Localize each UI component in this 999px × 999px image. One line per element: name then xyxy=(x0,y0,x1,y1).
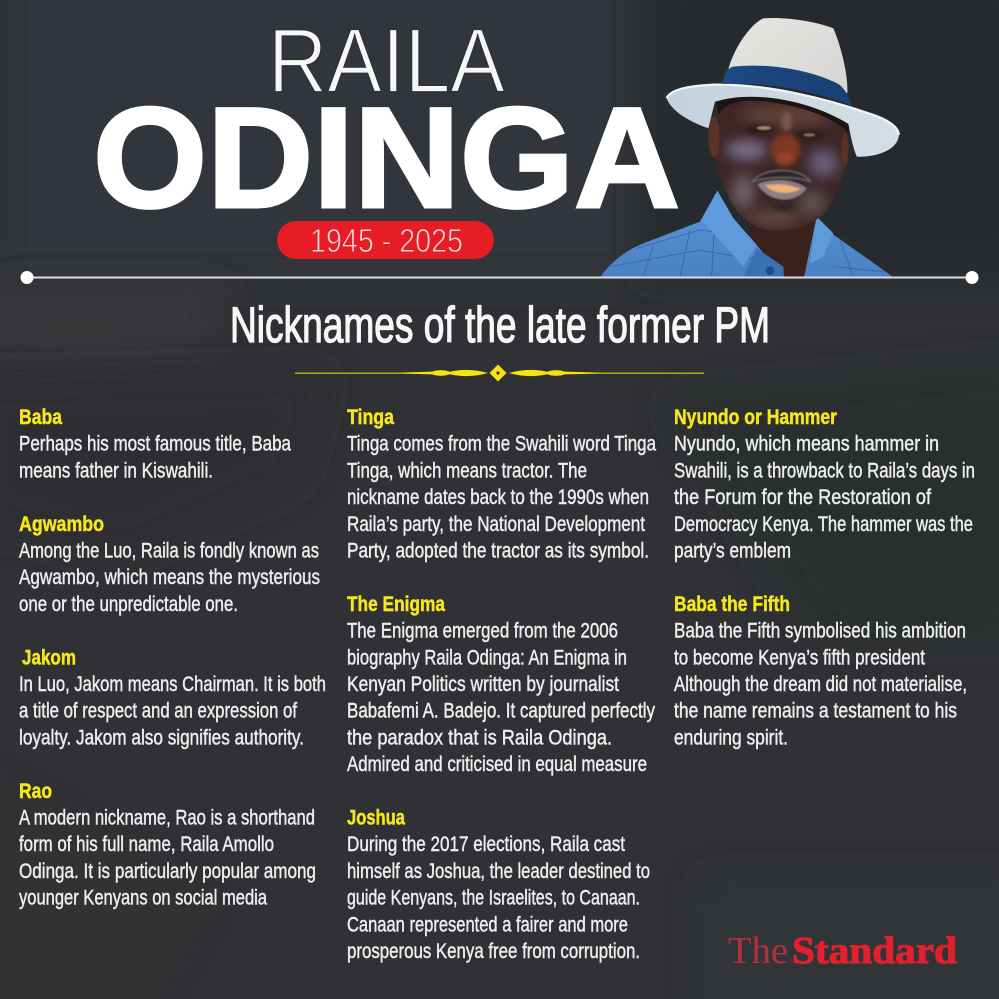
The Enigma: the paradox that is Raila Odinga. xyxy=(347,725,612,749)
logo: The Standard xyxy=(728,930,957,972)
Nyundo or Hammer: party’s emblem xyxy=(674,538,791,562)
Tinga: Tinga xyxy=(347,406,394,429)
Jakom xyxy=(19,646,326,749)
portrait hat xyxy=(667,18,899,157)
Joshua: During the 2017 elections, Raila cast xyxy=(347,832,625,856)
yellow ornament xyxy=(295,364,704,382)
Jakom: Jakom xyxy=(22,646,76,669)
Rao: Odinga. It is particularly popular among xyxy=(19,859,316,883)
Joshua: himself as Joshua, the leader destined to xyxy=(347,859,650,883)
Baba: Perhaps his most famous title, Baba xyxy=(19,432,291,456)
The Enigma: biography Raila Odinga: An Enigma in xyxy=(347,645,627,669)
Baba: Baba xyxy=(19,406,62,429)
Baba the Fifth xyxy=(674,593,967,749)
Baba: means father in Kiswahili. xyxy=(19,458,213,482)
Tinga: Party, adopted the tractor as its symbol. xyxy=(347,538,649,562)
Rao: form of his full name, Raila Amollo xyxy=(19,832,274,856)
Nyundo or Hammer: the Forum for the Restoration of xyxy=(674,485,931,509)
Nyundo or Hammer: Nyundo, which means hammer in xyxy=(674,432,939,456)
Agwambo: Agwambo xyxy=(19,513,104,536)
Jakom: a title of respect and an expression of xyxy=(19,699,297,723)
Tinga: Tinga comes from the Swahili word Tinga xyxy=(347,432,656,456)
Rao xyxy=(19,780,316,910)
Baba xyxy=(19,406,291,482)
logo: The Standard: The xyxy=(728,930,788,972)
The Enigma: The Enigma xyxy=(347,593,445,616)
Tinga xyxy=(347,406,656,562)
Rao: A modern nickname, Rao is a shorthand xyxy=(19,806,315,830)
Agwambo: Agwambo, which means the mysterious xyxy=(19,565,320,589)
logo: The Standard: Standard xyxy=(792,930,957,972)
The Enigma xyxy=(347,593,655,776)
Tinga: Raila’s party, the National Development xyxy=(347,512,645,536)
portrait face xyxy=(708,96,849,231)
column 2 xyxy=(347,406,656,963)
Tinga: Tinga, which means tractor. The xyxy=(347,458,587,482)
Rao: younger Kenyans on social media xyxy=(19,886,267,910)
portrait shirt xyxy=(600,191,893,277)
portrait neck xyxy=(743,213,820,277)
Jakom: loyalty. Jakom also signifies authority. xyxy=(19,725,304,749)
Agwambo: one or the unpredictable one. xyxy=(19,592,238,616)
Baba the Fifth: to become Kenya’s fifth president xyxy=(674,645,925,669)
Jakom: In Luo, Jakom means Chairman. It is both xyxy=(19,672,326,696)
portrait: man in white hat and blue shirt xyxy=(600,18,899,277)
Nyundo or Hammer xyxy=(674,406,975,562)
Tinga: nickname dates back to the 1990s when xyxy=(347,485,649,509)
title: ODINGA: ODINGA xyxy=(93,79,680,238)
date pill: 1945 - 2025 xyxy=(310,222,463,259)
Joshua xyxy=(347,806,650,963)
Baba the Fifth: enduring spirit. xyxy=(674,725,788,749)
Joshua: prosperous Kenya free from corruption. xyxy=(347,939,640,963)
title: RAILA: RAILA xyxy=(268,11,505,112)
Joshua: Canaan represented a fairer and more xyxy=(347,912,628,936)
divider line with end dots xyxy=(20,271,978,284)
Joshua: Joshua xyxy=(347,806,405,830)
column 1 xyxy=(19,406,326,910)
Nyundo or Hammer: Nyundo or Hammer xyxy=(674,406,837,429)
Agwambo xyxy=(19,513,320,616)
The Enigma: The Enigma emerged from the 2006 xyxy=(347,619,618,643)
Agwambo: Among the Luo, Raila is fondly known as xyxy=(19,538,319,562)
Rao: Rao xyxy=(19,780,52,803)
The Enigma: Babafemi A. Badejo. It captured perfectly xyxy=(347,699,655,723)
column 3 xyxy=(674,406,975,749)
Baba the Fifth: Baba the Fifth xyxy=(674,593,790,616)
heading: Nicknames of the late former PM xyxy=(230,297,770,353)
The Enigma: Admired and criticised in equal measure xyxy=(347,752,647,776)
The Enigma: Kenyan Politics written by journalist xyxy=(347,672,619,696)
Joshua: guide Kenyans, the Israelites, to Canaan. xyxy=(347,886,640,910)
